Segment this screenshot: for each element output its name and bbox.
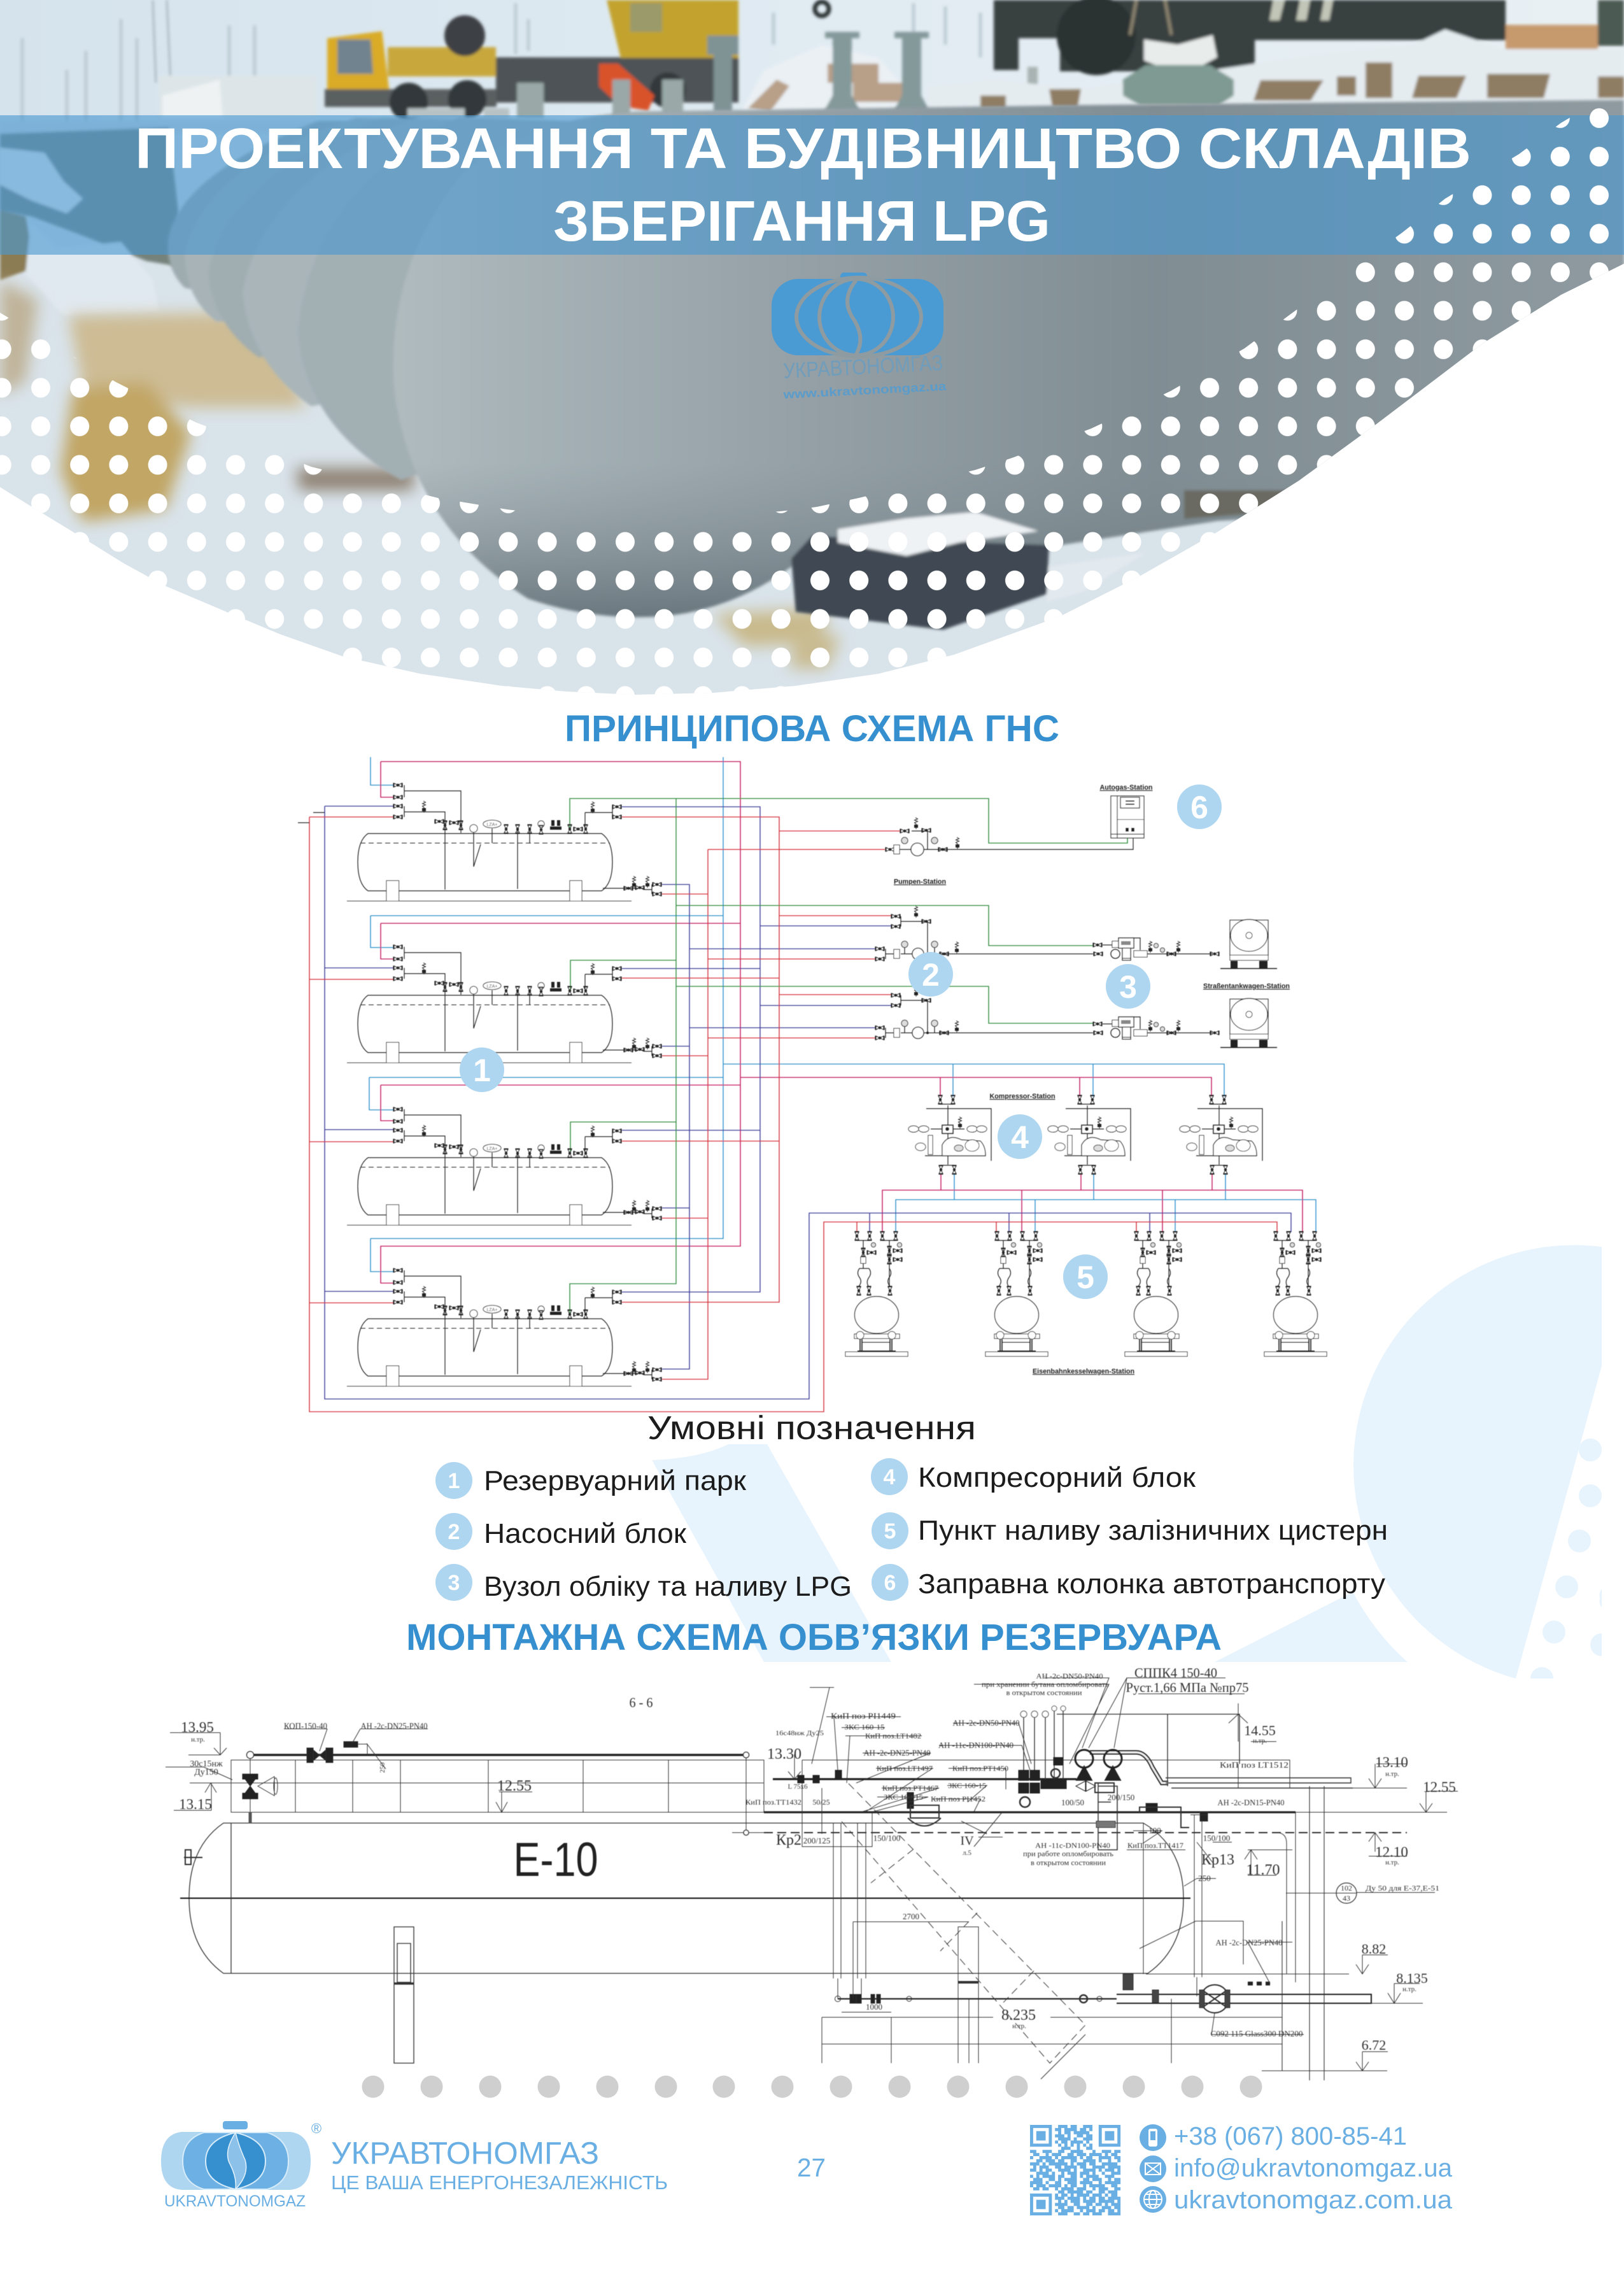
marker 4 [998, 1114, 1042, 1159]
marker 1: 1 [473, 1053, 491, 1088]
legend item 1 [435, 1462, 747, 1499]
title: ПРОЕКТУВАННЯ ТА БУДІВНИЦТВО СКЛАДІВ [135, 117, 1471, 181]
pump station rows [875, 906, 1093, 1040]
dimension and callout text: 6 - 6 [629, 1694, 653, 1710]
tank 1 [347, 783, 661, 901]
station labels [894, 784, 1290, 1375]
rail loading stations [845, 1232, 1327, 1356]
hook [815, 2, 829, 16]
dimension and callout text: 200/125 [803, 1836, 830, 1845]
dimension and callout text: в открытом состоянии [1031, 1858, 1106, 1867]
dimension and callout text: АН -11с-DN100-PN40 [938, 1740, 1013, 1750]
dimension and callout text: Руст.1,66 МПа №пр75 [1126, 1680, 1249, 1695]
dimension and callout text: АН -2с-DN50-PN40 [952, 1718, 1020, 1728]
station labels: Autogas-Station [1100, 784, 1153, 792]
dimension and callout text: 13.10 [1375, 1754, 1408, 1770]
title [135, 117, 1471, 253]
dimension and callout text: 14.55 [1244, 1722, 1276, 1738]
dimension and callout text: С092 115 Glass300 DN200 [1211, 2029, 1303, 2038]
manway [1123, 65, 1234, 105]
dimension and callout text: АН -2с-DN15-PN40 [1217, 1798, 1285, 1807]
dimension and callout text: КиП поз LT1512 [1220, 1760, 1289, 1770]
dimension and callout text: АН -2с-DN25-PN40 [360, 1722, 428, 1731]
tank 3 [347, 1107, 661, 1225]
dimension and callout text: КиП поз.PT1450 [952, 1764, 1008, 1773]
crane lorry [496, 57, 738, 103]
company name and tagline: УКРАВТОНОМГАЗ [331, 2136, 599, 2171]
dimension and callout text: IV [960, 1834, 974, 1848]
marker 1 [460, 1047, 504, 1092]
dotted divider [362, 2076, 1262, 2098]
dimension and callout text: ЗКС 160-15 [948, 1781, 986, 1790]
dimension and callout text: н.тр. [1012, 2022, 1026, 2030]
dimension and callout text: при хранении бутана опломбировать [982, 1680, 1110, 1689]
dimension and callout text: 100/50 [1061, 1798, 1084, 1807]
page number: 27 [797, 2153, 826, 2182]
marker 4: 4 [1011, 1119, 1029, 1155]
marker 5: 5 [1077, 1260, 1094, 1295]
dimension and callout text: 150/100 [1203, 1833, 1230, 1843]
concrete block [791, 536, 1049, 630]
dimension and callout text: 11.70 [1246, 1862, 1280, 1878]
dimension and callout text: КиП поз.ТТ1432 [745, 1798, 801, 1807]
dimension and callout text: АН -2с-DN25-PN40 [1216, 1938, 1282, 1947]
dimension and callout text [179, 1665, 1456, 2053]
dimension and callout text: Кр13 [1201, 1852, 1234, 1868]
dimension and callout text: н.тр. [1402, 1985, 1416, 1993]
bare trees [22, 3, 980, 127]
dimension and callout text: 8.135 [1396, 1970, 1428, 1986]
dimension and callout text: КиП поз.LT1497 [877, 1764, 933, 1773]
company name and tagline: ЦЕ ВАША ЕНЕРГОНЕЗАЛЕЖНІСТЬ [331, 2171, 668, 2194]
dimension and callout text: 102 [1341, 1884, 1352, 1892]
tank 4 [347, 1268, 661, 1386]
dimension and callout text: КиП поз.РТ1467 [882, 1784, 938, 1793]
dimension and callout text: 50/25 [812, 1798, 830, 1807]
dimension and callout text: 1000 [866, 2002, 882, 2012]
dimension and callout text: н.тр. [1385, 1859, 1399, 1866]
building [159, 76, 316, 118]
logo painted on the tank [772, 273, 947, 402]
legend item 2 [435, 1513, 687, 1550]
right piping and valves [764, 1678, 1458, 2080]
dimension and callout text: н.тр. [1385, 1770, 1399, 1778]
footer logo [161, 2120, 321, 2210]
marker 6: 6 [1190, 790, 1208, 825]
title band [0, 115, 1624, 255]
dimension and callout text: КиП поз.LT1482 [865, 1731, 921, 1740]
dimension and callout text: н.тр. [191, 1736, 205, 1743]
company name and tagline [331, 2136, 668, 2194]
dimension and callout text: Кр2 [776, 1832, 801, 1849]
marker 2 [908, 952, 953, 997]
station labels: Straßentankwagen-Station [1203, 983, 1290, 990]
dimension and callout text: АН -2с-DN25-PN40 [863, 1748, 931, 1757]
legend item 4: Компресорний блок [918, 1462, 1196, 1493]
legend item 3: Вузол обліку та наливу LPG [484, 1571, 852, 1602]
marker 3 [1106, 964, 1150, 1009]
legend item 5: 5 [884, 1519, 896, 1544]
platform and left piping [166, 1729, 764, 1835]
marker 6 [1177, 785, 1222, 829]
dimension and callout text: СППК4 150-40 [1134, 1665, 1217, 1680]
QR code [1030, 2125, 1120, 2215]
pipework [298, 757, 1316, 1412]
header photo: tanks at a snowy construction site [0, 0, 1624, 700]
legend heading: Умовні позначення [647, 1410, 976, 1447]
title: ЗБЕРІГАННЯ LPG [553, 190, 1050, 253]
snow mound behind posts [738, 45, 929, 116]
legend [435, 1458, 1388, 1602]
dimension and callout text: 12.10 [1375, 1844, 1408, 1860]
legend item 2: Насосний блок [484, 1518, 687, 1549]
dimension and callout text: 12.55 [497, 1778, 532, 1794]
footer logo: ® [311, 2120, 321, 2136]
legend item 1: Резервуарний парк [484, 1465, 747, 1496]
background shape: light blue numeral [652, 1245, 1602, 1679]
station labels: Pumpen-Station [894, 878, 946, 886]
soil embankment left [0, 127, 185, 267]
dimension and callout text: 13.15 [179, 1796, 212, 1812]
legend item 2: 2 [448, 1520, 460, 1544]
dimension and callout text: 150/100 [873, 1833, 900, 1843]
station labels: Kompressor-Station [989, 1093, 1056, 1100]
contact: website: ukravtonomgaz.com.ua [1174, 2186, 1453, 2214]
dimension and callout text: 100 [1148, 1826, 1161, 1835]
autogas pump row [886, 818, 1133, 856]
posts [824, 32, 861, 111]
dimension and callout text: 13.95 [181, 1719, 214, 1735]
dimension and callout text: Ду 50 для Е-37,Е-51 [1366, 1884, 1439, 1892]
dimension and callout text: 200/150 [1108, 1793, 1134, 1802]
dimension and callout text: при работе опломбировать [1023, 1849, 1114, 1858]
vessel tag E-10: E-10 [513, 1833, 598, 1886]
dimension and callout text: л.5 [963, 1849, 971, 1857]
legend item 6: Заправна колонка автотранспорту [918, 1568, 1385, 1600]
heading: principal scheme: ПРИНЦИПОВА СХЕМА ГНС [565, 708, 1059, 749]
legend item 1: 1 [448, 1469, 460, 1493]
dimension and callout text: 16с48нж Ду25 [775, 1729, 824, 1737]
dimension and callout text: КОП-150-40 [284, 1722, 327, 1731]
station labels: Eisenbahnkesselwagen-Station [1033, 1368, 1134, 1375]
tank piping drawing E-10 [166, 1665, 1458, 2080]
dimension and callout text: Ду150 [194, 1768, 218, 1777]
dimension and callout text: 8.235 [1001, 2007, 1036, 2024]
marker 5 [1063, 1254, 1108, 1299]
legend item 6: 6 [884, 1571, 896, 1595]
dimension and callout text: 2700 [903, 1912, 919, 1921]
metering units and road tankers [1093, 919, 1277, 1047]
dimension and callout text: 250 [1198, 1873, 1211, 1883]
logo painted on the tank: www.ukravtonomgaz.ua [782, 380, 947, 402]
legend item 4: 4 [884, 1465, 896, 1489]
contact: phone: +38 (067) 800-85-41 [1174, 2122, 1407, 2150]
ground stains [69, 312, 306, 408]
dimension and callout text: L 75х6 [787, 1783, 808, 1791]
tanks [168, 100, 1624, 630]
contact: email: info@ukravtonomgaz.ua [1174, 2154, 1453, 2182]
legend item 5: Пункт наливу залізничних цистерн [918, 1515, 1388, 1546]
dimension and callout text: 13.30 [767, 1746, 801, 1763]
dimension and callout text: АН -2с-DN50-PN40 [1036, 1672, 1103, 1680]
dimension and callout text: КиП поз.ТТ1417 [1127, 1841, 1183, 1850]
dark lorry [994, 0, 1506, 71]
dimension and callout text: 6.72 [1362, 2037, 1386, 2053]
tank 2 [347, 945, 661, 1063]
dimension and callout text: ЗКС 160-15 [844, 1722, 885, 1731]
dimension and callout text: 43 [1343, 1894, 1350, 1903]
dimension and callout text: 8.82 [1362, 1941, 1386, 1957]
dimension and callout text: КиП поз PI1449 [831, 1711, 896, 1721]
dimension and callout text: в открытом состоянии [1006, 1688, 1082, 1697]
dimension and callout text: 12.55 [1423, 1779, 1456, 1795]
dimension and callout text: н.тр. [1253, 1737, 1267, 1745]
compressors [908, 1095, 1262, 1174]
dimension and callout text: АН -11с-DN100-PN40 [1035, 1841, 1110, 1850]
dot pattern overlay [0, 86, 1624, 700]
marker 3: 3 [1119, 969, 1137, 1005]
footer logo: UKRAVTONOMGAZ [164, 2192, 306, 2210]
autogas dispenser [1111, 796, 1144, 838]
dimension and callout text: КиП поз PI1452 [931, 1794, 985, 1803]
heading: installation scheme: МОНТАЖНА СХЕМА ОБВ’ЯЗКИ РЕЗЕРВУАРА [406, 1617, 1222, 1658]
process diagram [298, 757, 1327, 1412]
logo painted on the tank: УКРАВТОНОМГАЗ [782, 351, 943, 383]
dimension and callout text: ЗКС 160-15 [884, 1793, 923, 1801]
snow bank with soil [928, 29, 1624, 111]
dimension and callout text: 250 [379, 1762, 386, 1773]
legend item 4 [871, 1458, 1196, 1495]
marker 2: 2 [922, 957, 940, 993]
vessel outline [180, 1823, 1190, 2063]
dimension and callout text: 30с15нж [190, 1759, 223, 1769]
legend item 3: 3 [448, 1571, 460, 1595]
